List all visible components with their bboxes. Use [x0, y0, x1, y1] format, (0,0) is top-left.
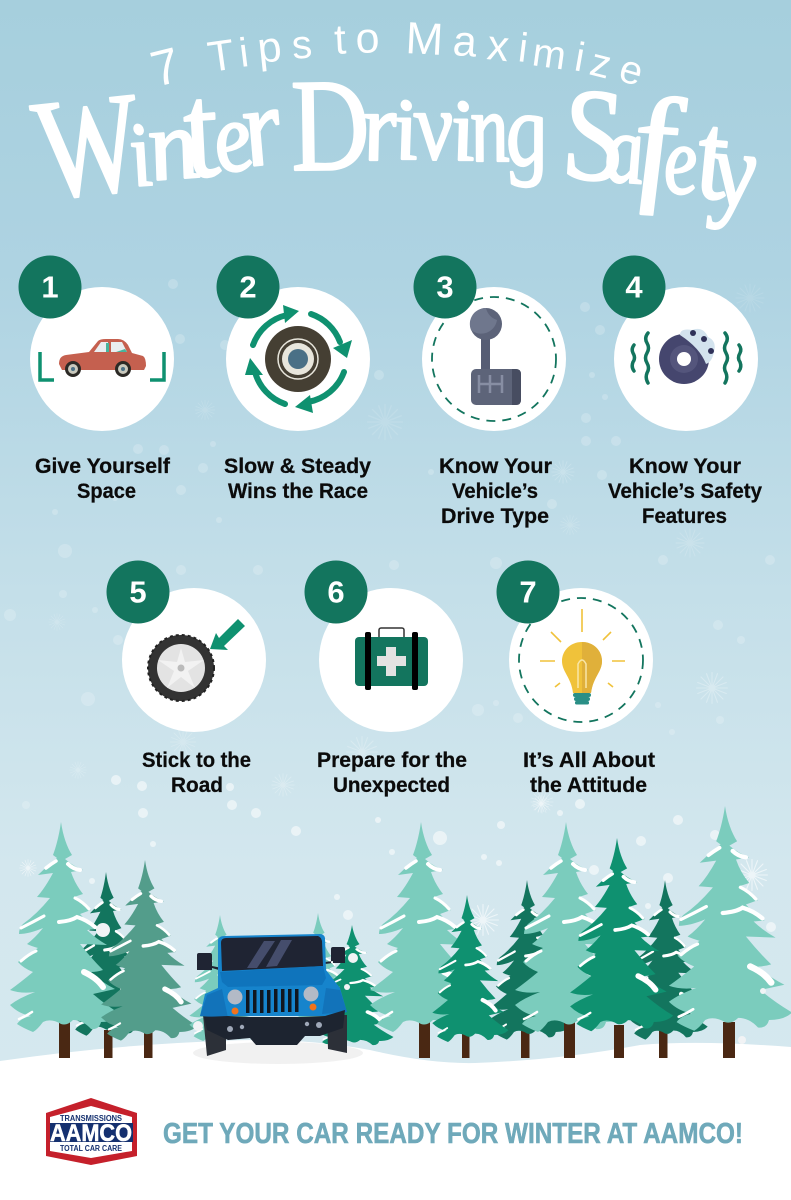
caption 2 — [224, 455, 371, 503]
title script: Winter Driving Safety: t — [166, 56, 234, 206]
caption 4: Features — [642, 505, 727, 528]
tree: green right of jeep — [317, 925, 393, 1047]
caption 7: It’s All About — [523, 749, 655, 772]
icon: gear shifter — [470, 308, 521, 405]
badge 3: 3 — [436, 270, 454, 304]
title script: Winter Driving Safety: r — [226, 65, 297, 190]
caption 5: Road — [171, 774, 223, 797]
title line: 7 Tips to Maximize: m — [530, 30, 569, 79]
title line: 7 Tips to Maximize: a — [451, 17, 479, 67]
title script: Winter Driving Safety: v — [407, 72, 460, 181]
caption 2: Wins the Race — [228, 480, 368, 503]
panel: tip 6 — [304, 560, 467, 797]
icon: car between brackets — [40, 339, 164, 380]
icon: brake disc with vibration lines — [632, 329, 741, 384]
title line: 7 Tips to Maximize: i — [236, 29, 251, 76]
jeep lights — [228, 986, 318, 1014]
title line: 7 Tips to Maximize: T — [205, 31, 237, 82]
caption 4: Vehicle’s Safety — [608, 480, 762, 503]
caption 6: Prepare for the — [317, 749, 467, 772]
badge 5 — [106, 560, 170, 624]
badge 1: 1 — [41, 270, 59, 304]
jeep windshield — [221, 936, 323, 971]
trees right — [370, 806, 791, 1058]
title script: Winter Driving Safety — [11, 52, 760, 233]
title line: 7 Tips to Maximize: e — [615, 46, 648, 95]
caption 5: Stick to the — [142, 749, 251, 772]
caption 1 — [35, 455, 171, 503]
jeep grille — [246, 989, 298, 1013]
icon: first aid kit — [355, 628, 428, 690]
caption 3: Know Your — [439, 455, 552, 478]
caption 4: Know Your — [629, 455, 741, 478]
tree: light behind jeep left — [189, 915, 257, 1041]
title line: 7 Tips to Maximize: i — [516, 24, 531, 71]
badge 2: 2 — [239, 270, 257, 304]
panel: tip 5 — [106, 560, 266, 797]
tree: mid green — [101, 860, 197, 1058]
jeep body — [200, 934, 347, 1016]
caption 3: Vehicle’s — [452, 480, 538, 503]
jeep bumper — [204, 1010, 345, 1045]
title line: 7 Tips to Maximize: p — [255, 23, 284, 73]
title line: 7 Tips to Maximize: 7 — [145, 37, 186, 98]
title script: Winter Driving Safety: e — [200, 81, 263, 194]
tree: light far right — [669, 806, 791, 1058]
title script: Winter Driving Safety: W — [11, 62, 169, 228]
caption 1: Space — [77, 480, 136, 503]
footer logo: AAMCO: AAMCO — [50, 1120, 132, 1147]
caption 7 — [523, 749, 655, 797]
panel: tip 1 — [18, 256, 174, 503]
title script: Winter Driving Safety: i — [386, 81, 424, 179]
title — [11, 12, 760, 233]
panel: tip 4 — [602, 256, 762, 528]
title script: Winter Driving Safety: f — [629, 71, 696, 219]
title script: Winter Driving Safety: e — [660, 105, 700, 217]
tree: dark right — [629, 880, 708, 1058]
title line: 7 Tips to Maximize: M — [404, 12, 445, 65]
badge 6: 6 — [327, 574, 345, 610]
badge 4: 4 — [625, 270, 643, 304]
footer logo: AAMCO — [46, 1098, 137, 1165]
icon: tire with arrow — [148, 619, 245, 701]
title script: Winter Driving Safety: a — [600, 94, 647, 206]
badge 4 — [602, 256, 666, 318]
title line: 7 Tips to Maximize: t — [333, 15, 347, 63]
tree: green right — [570, 838, 673, 1058]
caption 6 — [317, 749, 467, 797]
caption 5 — [142, 749, 251, 797]
title line: 7 Tips to Maximize: x — [485, 21, 512, 71]
footer logo: AAMCO: TRANSMISSIONS — [60, 1114, 123, 1123]
title script: Winter Driving Safety: n — [135, 88, 208, 202]
title script: Winter Driving Safety: S — [557, 60, 627, 210]
caption 1: Give Yourself — [35, 455, 171, 478]
panel: tip 2 — [216, 256, 371, 503]
badge 3 — [414, 256, 476, 318]
caption 3: Drive Type — [441, 505, 549, 528]
title script: Winter Driving Safety: y — [700, 105, 760, 233]
caption 7: the Attitude — [530, 774, 647, 797]
title line: 7 Tips to Maximize: s — [290, 22, 314, 68]
jeep — [193, 934, 363, 1064]
tree: dark back — [70, 872, 149, 1058]
title line: 7 Tips to Maximize: z — [586, 40, 616, 88]
panel: tip 3 — [414, 256, 566, 528]
badge 6 — [304, 560, 368, 624]
caption 4 — [608, 455, 762, 528]
icon: wheel with circular arrows — [245, 305, 352, 413]
tree: dark — [490, 880, 571, 1058]
title script: Winter Driving Safety: g — [496, 72, 554, 188]
title script: Winter Driving Safety: r — [354, 73, 406, 182]
title script: Winter Driving Safety: D — [276, 52, 379, 199]
tree: light front left — [10, 822, 122, 1058]
jeep fenders — [200, 988, 347, 1018]
snow in front of trees — [96, 923, 766, 1044]
tree: light behind jeep right — [287, 913, 355, 1039]
badge 2 — [216, 256, 280, 318]
tree: light — [370, 822, 482, 1058]
tree: green — [432, 895, 508, 1058]
footer logo: AAMCO: TOTAL CAR CARE — [60, 1144, 123, 1153]
caption 3 — [439, 455, 552, 528]
jeep hood — [220, 966, 326, 987]
panel: tip 7 — [496, 560, 655, 797]
title script: Winter Driving Safety: i — [443, 82, 481, 180]
tree: light middle — [515, 822, 627, 1058]
title script: Winter Driving Safety: i — [118, 104, 161, 206]
caption 6: Unexpected — [333, 774, 450, 797]
falling snow and snowflakes — [4, 279, 776, 935]
jeep mirrors — [197, 947, 345, 971]
badge 5: 5 — [129, 574, 147, 610]
jeep tires — [203, 1015, 347, 1056]
trees left — [10, 822, 393, 1058]
badge 7: 7 — [519, 574, 537, 610]
icon: light bulb — [540, 609, 625, 704]
badge 7 — [496, 560, 560, 624]
badge 1 — [18, 256, 82, 318]
caption 2: Slow & Steady — [224, 455, 371, 478]
title script: Winter Driving Safety: t — [692, 86, 732, 228]
title script: Winter Driving Safety: n — [462, 74, 515, 183]
snowy ground — [0, 1040, 791, 1200]
title line: 7 Tips to Maximize: o — [355, 14, 380, 63]
title line: 7 Tips to Maximize: i — [571, 34, 588, 80]
title line: 7 Tips to Maximize — [145, 12, 648, 98]
